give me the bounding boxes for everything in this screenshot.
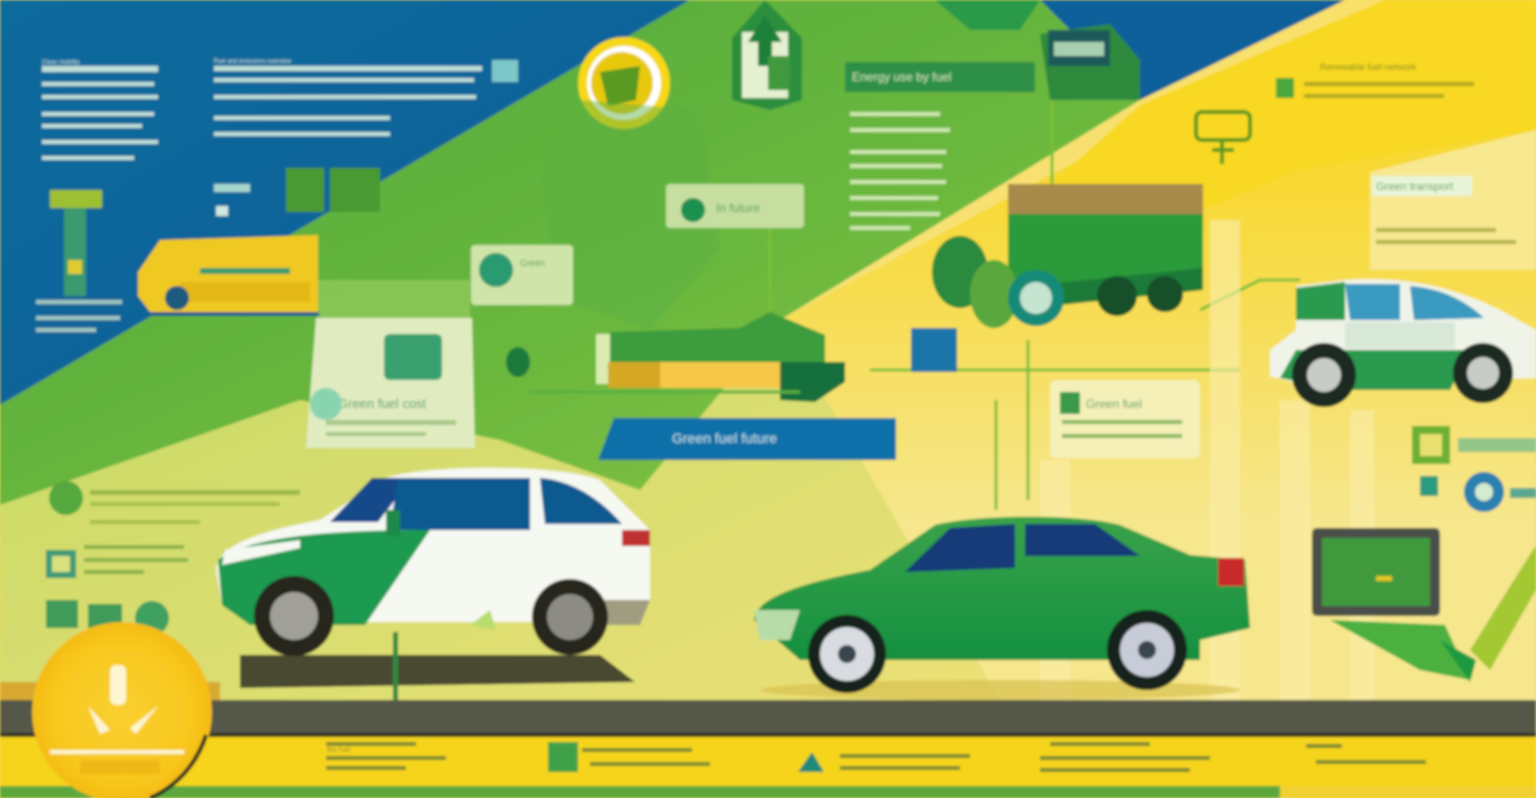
panel: right icons and labels [1412,426,1536,512]
arrow: connector lines [770,100,1300,510]
text block: top-middle column [214,59,482,136]
panel: blue label bar: Green fuel future [672,430,777,446]
callout: small green tag center: In future [716,201,760,215]
panel: top right text: Renewable fuel network [1320,62,1417,72]
road [0,682,1536,798]
icon: yellow outlined monitor [1196,112,1250,164]
illustration: right car top [1270,279,1536,407]
panel: brown and green truck [932,184,1203,328]
panel: blue label bar [598,418,896,460]
icon: blue square [911,328,957,372]
text block: green panel list [850,112,950,230]
callout: small green tag center [666,184,804,228]
illustration: green sedan [754,517,1250,700]
panel: heading bar: Energy use by fuel [852,70,951,84]
illustration: pale vertical streaks [1040,220,1374,700]
panel: green diagonal band [0,0,1140,505]
illustration: green plant bottom right [1330,545,1536,682]
panel: pale right card: Green transport [1376,181,1453,193]
text block: lower-left text [46,481,300,635]
callout: right pale text card: Green fuel [1086,397,1142,411]
icon: yellow sun badge [32,622,212,798]
panel: stacked bar chart [506,312,845,402]
panel: pale right card [1370,130,1536,270]
icon: green server box [1040,24,1140,100]
illustration: small pole [393,610,496,700]
icon: small square [492,60,518,82]
callout: pale card left centre: Green fuel cost [338,396,427,411]
text block: bottom labels: Bio fuel [327,747,351,754]
panel: blue top-left area [0,0,690,405]
text block: top-left column [42,60,158,160]
illustration: white blue SUV [216,468,650,688]
icon: green house badge [732,0,802,110]
callout: right pale text card [1050,380,1200,458]
panel: heading bar [845,62,1035,92]
callout: small green tag left [471,245,573,305]
text block: bottom labels [326,742,1426,772]
callout: small green tag left: Green [520,258,545,268]
panel: pale green translucent wall [318,100,720,440]
text block: top-middle column: Fuel and emissions overview [214,59,292,65]
text block: top-left column: Clean mobility [42,60,80,66]
panel: top right text [1276,62,1474,98]
panel: left yellow truck [36,168,380,332]
panel: blue top-right area [1040,0,1345,100]
callout: pale card left centre [306,318,475,448]
panel: dark green top tab [935,0,1040,30]
icon: green screen [1312,528,1440,616]
icon: yellow circle badge [578,37,670,129]
